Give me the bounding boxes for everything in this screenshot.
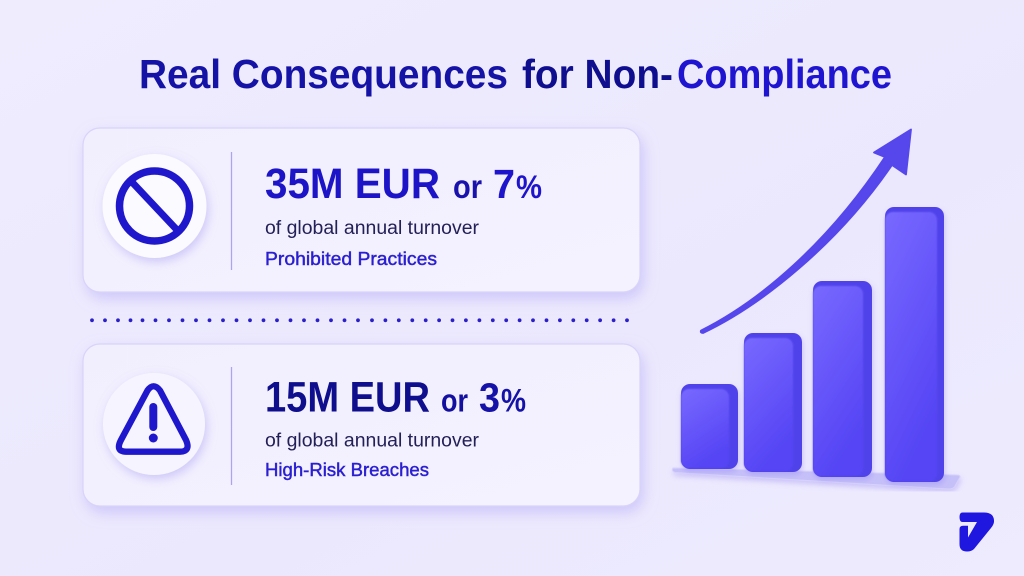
amount: 15M EUR or 3%: %	[501, 382, 526, 418]
amount: 15M EUR or 3%: 15M EUR	[265, 374, 430, 422]
title: Real Consequences	[139, 51, 508, 97]
description: of global annual turnover	[265, 430, 480, 452]
dotted divider	[90, 318, 629, 322]
amount: 35M EUR or 7%: 7	[493, 161, 515, 207]
arrow: upward trend	[701, 130, 911, 333]
bar 3	[813, 281, 872, 477]
amount: 35M EUR or 7%	[265, 160, 542, 208]
description: of global annual turnover	[265, 218, 480, 239]
amount: 15M EUR or 3%: 3	[479, 374, 500, 420]
bar 4	[885, 207, 944, 482]
title: for Non-	[522, 51, 673, 97]
amount: 35M EUR or 7%: or	[453, 168, 482, 205]
panel: high-risk breaches	[83, 344, 640, 506]
icon: warning triangle	[103, 373, 205, 475]
bar 1	[681, 384, 738, 469]
icon: prohibited sign	[102, 154, 206, 258]
amount: 35M EUR or 7%: %	[516, 169, 542, 205]
bar 2	[744, 333, 802, 472]
chart base platform	[672, 468, 960, 489]
chart: rising bars with arrow	[672, 130, 960, 489]
title	[139, 51, 892, 97]
amount: 15M EUR or 3%: or	[441, 382, 468, 418]
category label: Prohibited Practices	[265, 249, 437, 269]
title: Compliance	[677, 51, 892, 97]
amount: 35M EUR or 7%: 35M EUR	[265, 160, 440, 208]
logo	[960, 512, 994, 552]
panel: prohibited practices	[83, 128, 640, 292]
category label: High-Risk Breaches	[265, 460, 429, 480]
